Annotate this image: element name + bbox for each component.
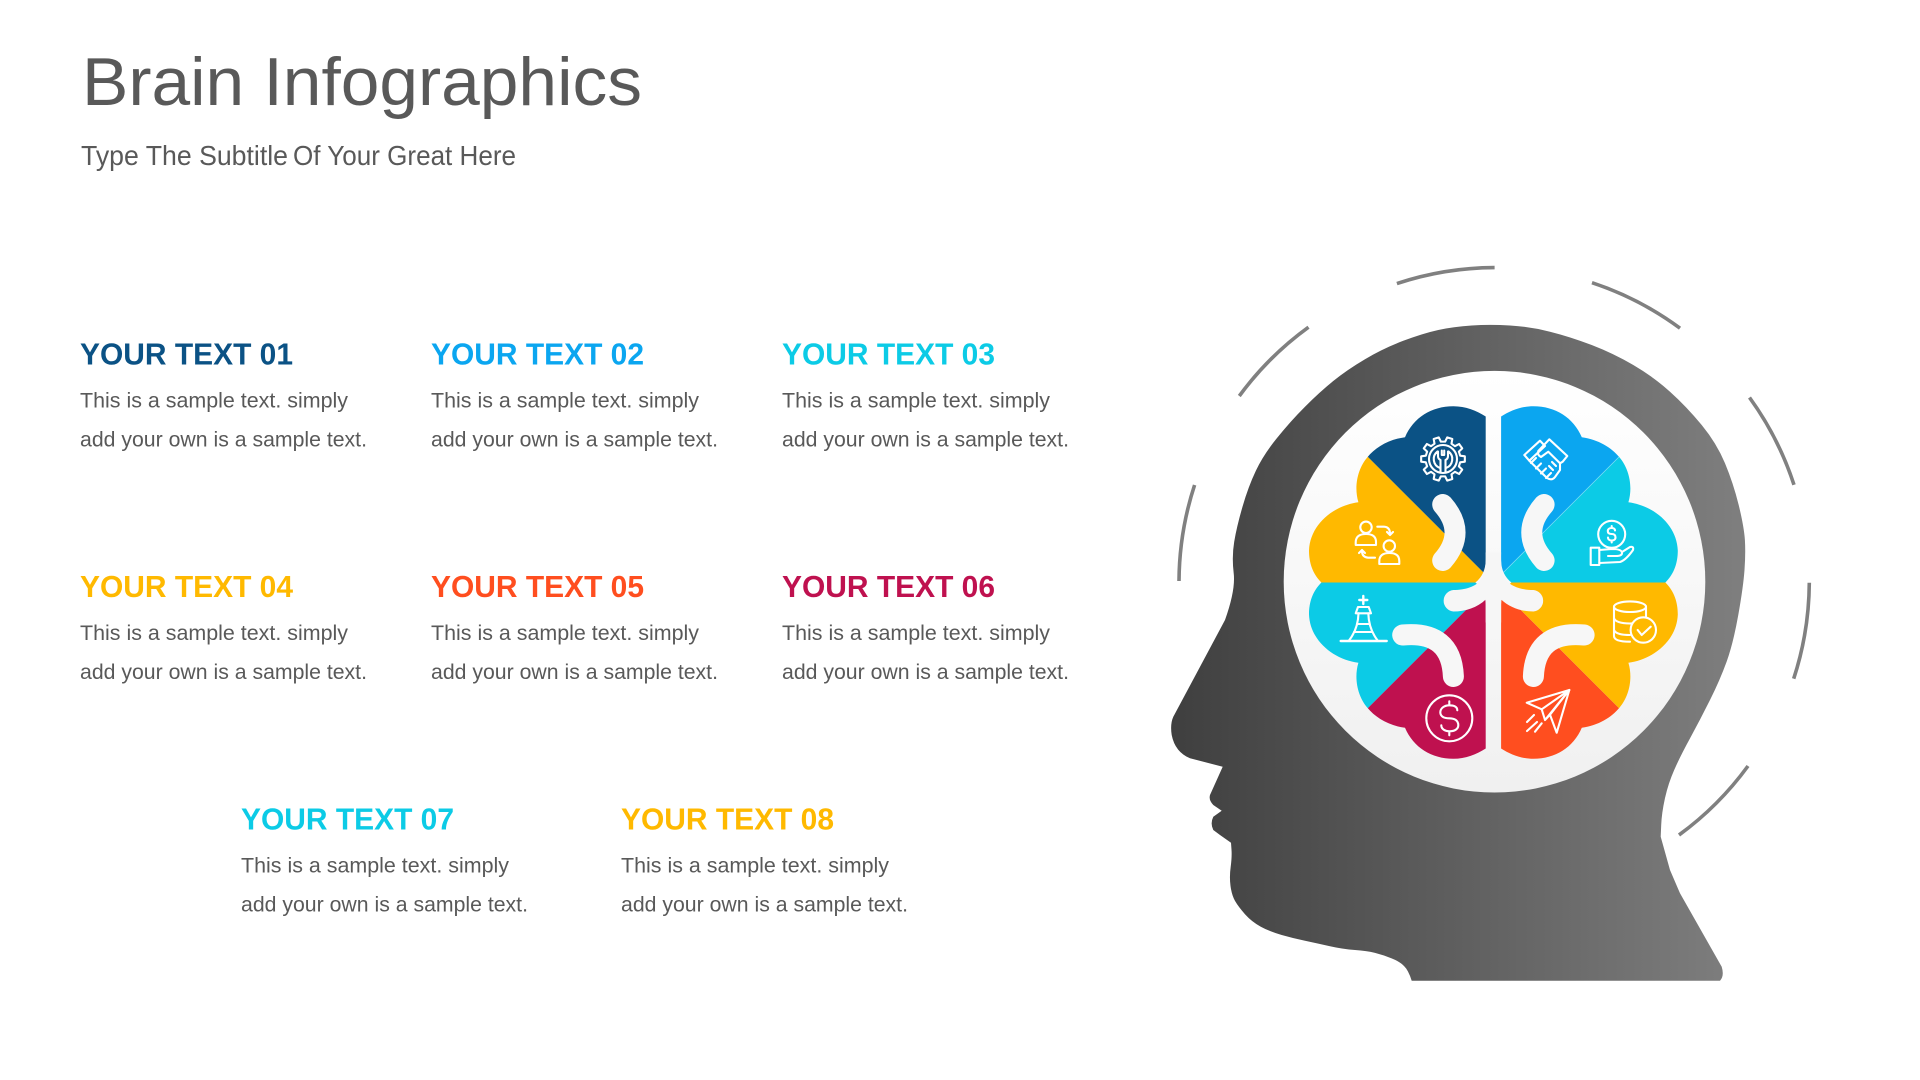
text block 01 [80, 338, 367, 452]
text block 05 [431, 570, 718, 684]
subtitle [81, 140, 516, 171]
subtitle: Type The Subtitle [81, 140, 288, 171]
icon: hand holding coin [1591, 521, 1633, 565]
text block 07: add your own is a sample text. [241, 894, 528, 916]
brain circle background [1284, 371, 1705, 792]
brain white folds [1403, 504, 1584, 676]
text block 05: YOUR TEXT 05 [431, 570, 644, 604]
text block 06 [782, 570, 1069, 684]
icon: people exchange [1356, 522, 1399, 564]
brain quadrant: lower right [1501, 582, 1678, 759]
text block 01: This is a sample text. simply [80, 390, 349, 412]
subtitle: Of Your Great Here [293, 140, 516, 171]
icon: paper plane [1527, 690, 1569, 733]
text block 05: add your own is a sample text. [431, 661, 718, 684]
text block 02: YOUR TEXT 02 [431, 338, 644, 372]
text block 04: add your own is a sample text. [80, 661, 367, 684]
text block 03: This is a sample text. simply [782, 390, 1051, 412]
text block 04 [80, 570, 367, 684]
text block 01: YOUR TEXT 01 [80, 338, 293, 372]
text block 04: This is a sample text. simply [80, 622, 349, 645]
brain quadrant: lower left [1309, 582, 1486, 759]
brain quadrant: upper left [1309, 406, 1486, 582]
text block 08: add your own is a sample text. [621, 894, 908, 916]
icon: handshake [1524, 439, 1567, 479]
text block 07: This is a sample text. simply [241, 854, 510, 878]
text block 05: This is a sample text. simply [431, 622, 700, 645]
icon: database with check [1614, 601, 1656, 643]
text block 08: This is a sample text. simply [621, 854, 890, 878]
text block 03 [782, 338, 1069, 452]
text block 06: YOUR TEXT 06 [782, 570, 995, 604]
icon: dollar circle [1426, 695, 1472, 741]
text block 02: This is a sample text. simply [431, 390, 700, 412]
head silhouette [1171, 325, 1745, 981]
text block 03: add your own is a sample text. [782, 428, 1069, 452]
text block 08: YOUR TEXT 08 [621, 802, 834, 836]
icon: gear with wrench [1421, 437, 1465, 481]
text block 06: This is a sample text. simply [782, 622, 1051, 645]
dashed arcs around head [1179, 268, 1809, 835]
text block 03: YOUR TEXT 03 [782, 338, 995, 372]
text block 02 [431, 338, 718, 452]
brain quadrant: upper right [1501, 406, 1678, 582]
text block 02: add your own is a sample text. [431, 428, 718, 452]
text block 01: add your own is a sample text. [80, 428, 367, 452]
text block 04: YOUR TEXT 04 [80, 570, 293, 604]
text block 07: YOUR TEXT 07 [241, 802, 454, 836]
icon: chess king [1341, 596, 1387, 641]
text block 06: add your own is a sample text. [782, 661, 1069, 684]
title: Brain Infographics [82, 44, 642, 120]
text block 08 [621, 802, 908, 916]
text block 07 [241, 802, 528, 916]
